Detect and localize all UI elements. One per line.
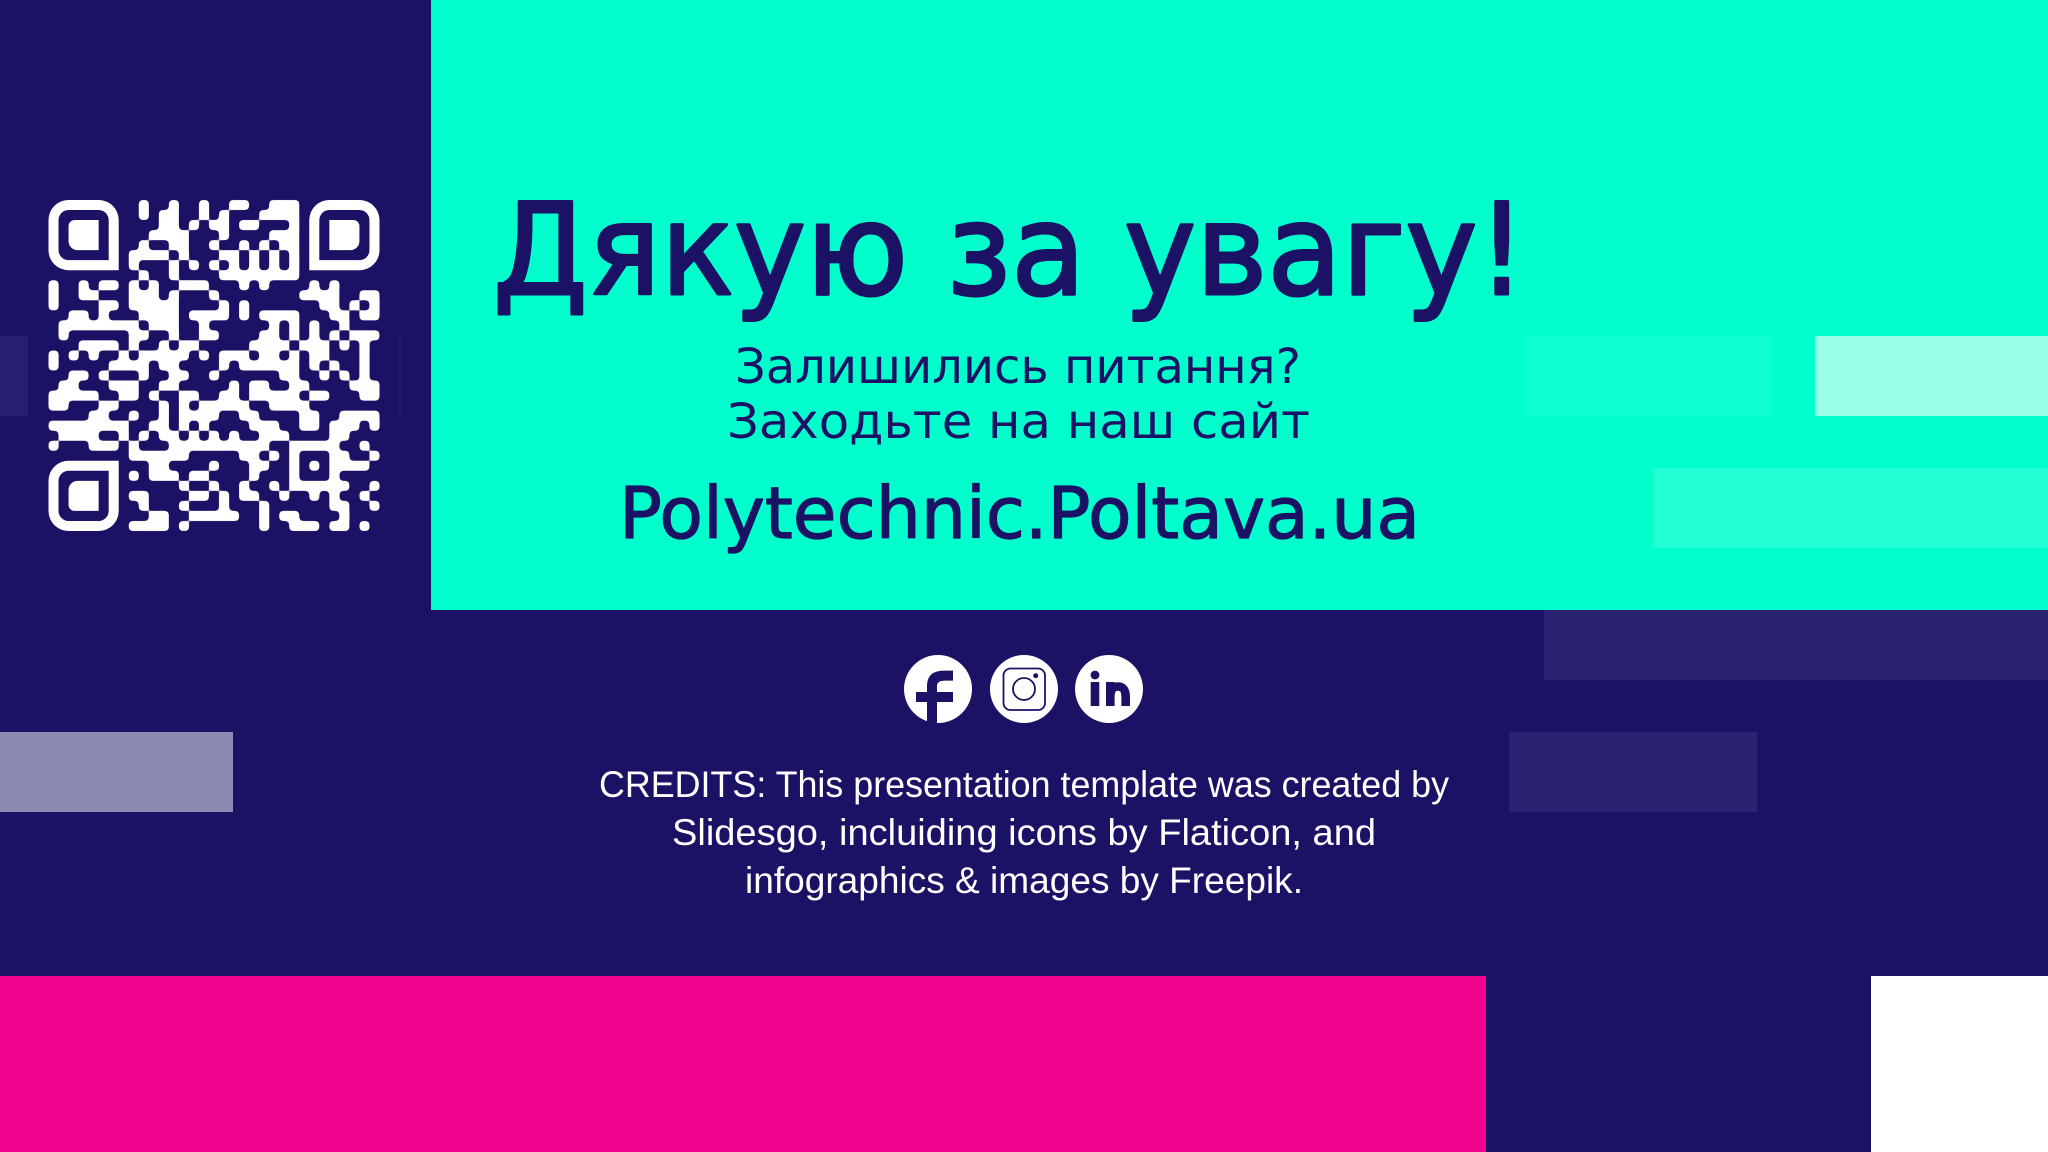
decorative bars on navy: [0, 336, 2048, 812]
website address: Polytechnic.Poltava.ua: [619, 472, 1420, 555]
subtitle text: [727, 339, 1310, 450]
panel: white footer block: [1871, 976, 2048, 1152]
panel: pink footer block: [0, 976, 1486, 1152]
QR code: [48, 200, 379, 531]
QR finder: top left: [48, 200, 119, 270]
panel: teal banner: [431, 0, 2048, 610]
QR finder: bottom left: [48, 461, 119, 531]
credits text: Slidesgo, incluiding icons by Flaticon, and: [672, 812, 1376, 853]
credits text: infographics & images by Freepik.: [745, 860, 1303, 901]
credits text: [599, 764, 1449, 901]
subtitle text: Залишились питання?: [735, 339, 1301, 395]
QR finder: top right: [309, 200, 379, 270]
credits text: CREDITS: This presentation template was created by: [599, 764, 1449, 805]
icon: linkedin: [1075, 655, 1143, 723]
subtitle text: Заходьте на наш сайт: [727, 394, 1310, 450]
title: Дякую за увагу!: [493, 176, 1526, 324]
QR data modules: [54, 205, 375, 526]
icon: facebook: [904, 655, 972, 723]
icon: instagram: [990, 655, 1058, 723]
